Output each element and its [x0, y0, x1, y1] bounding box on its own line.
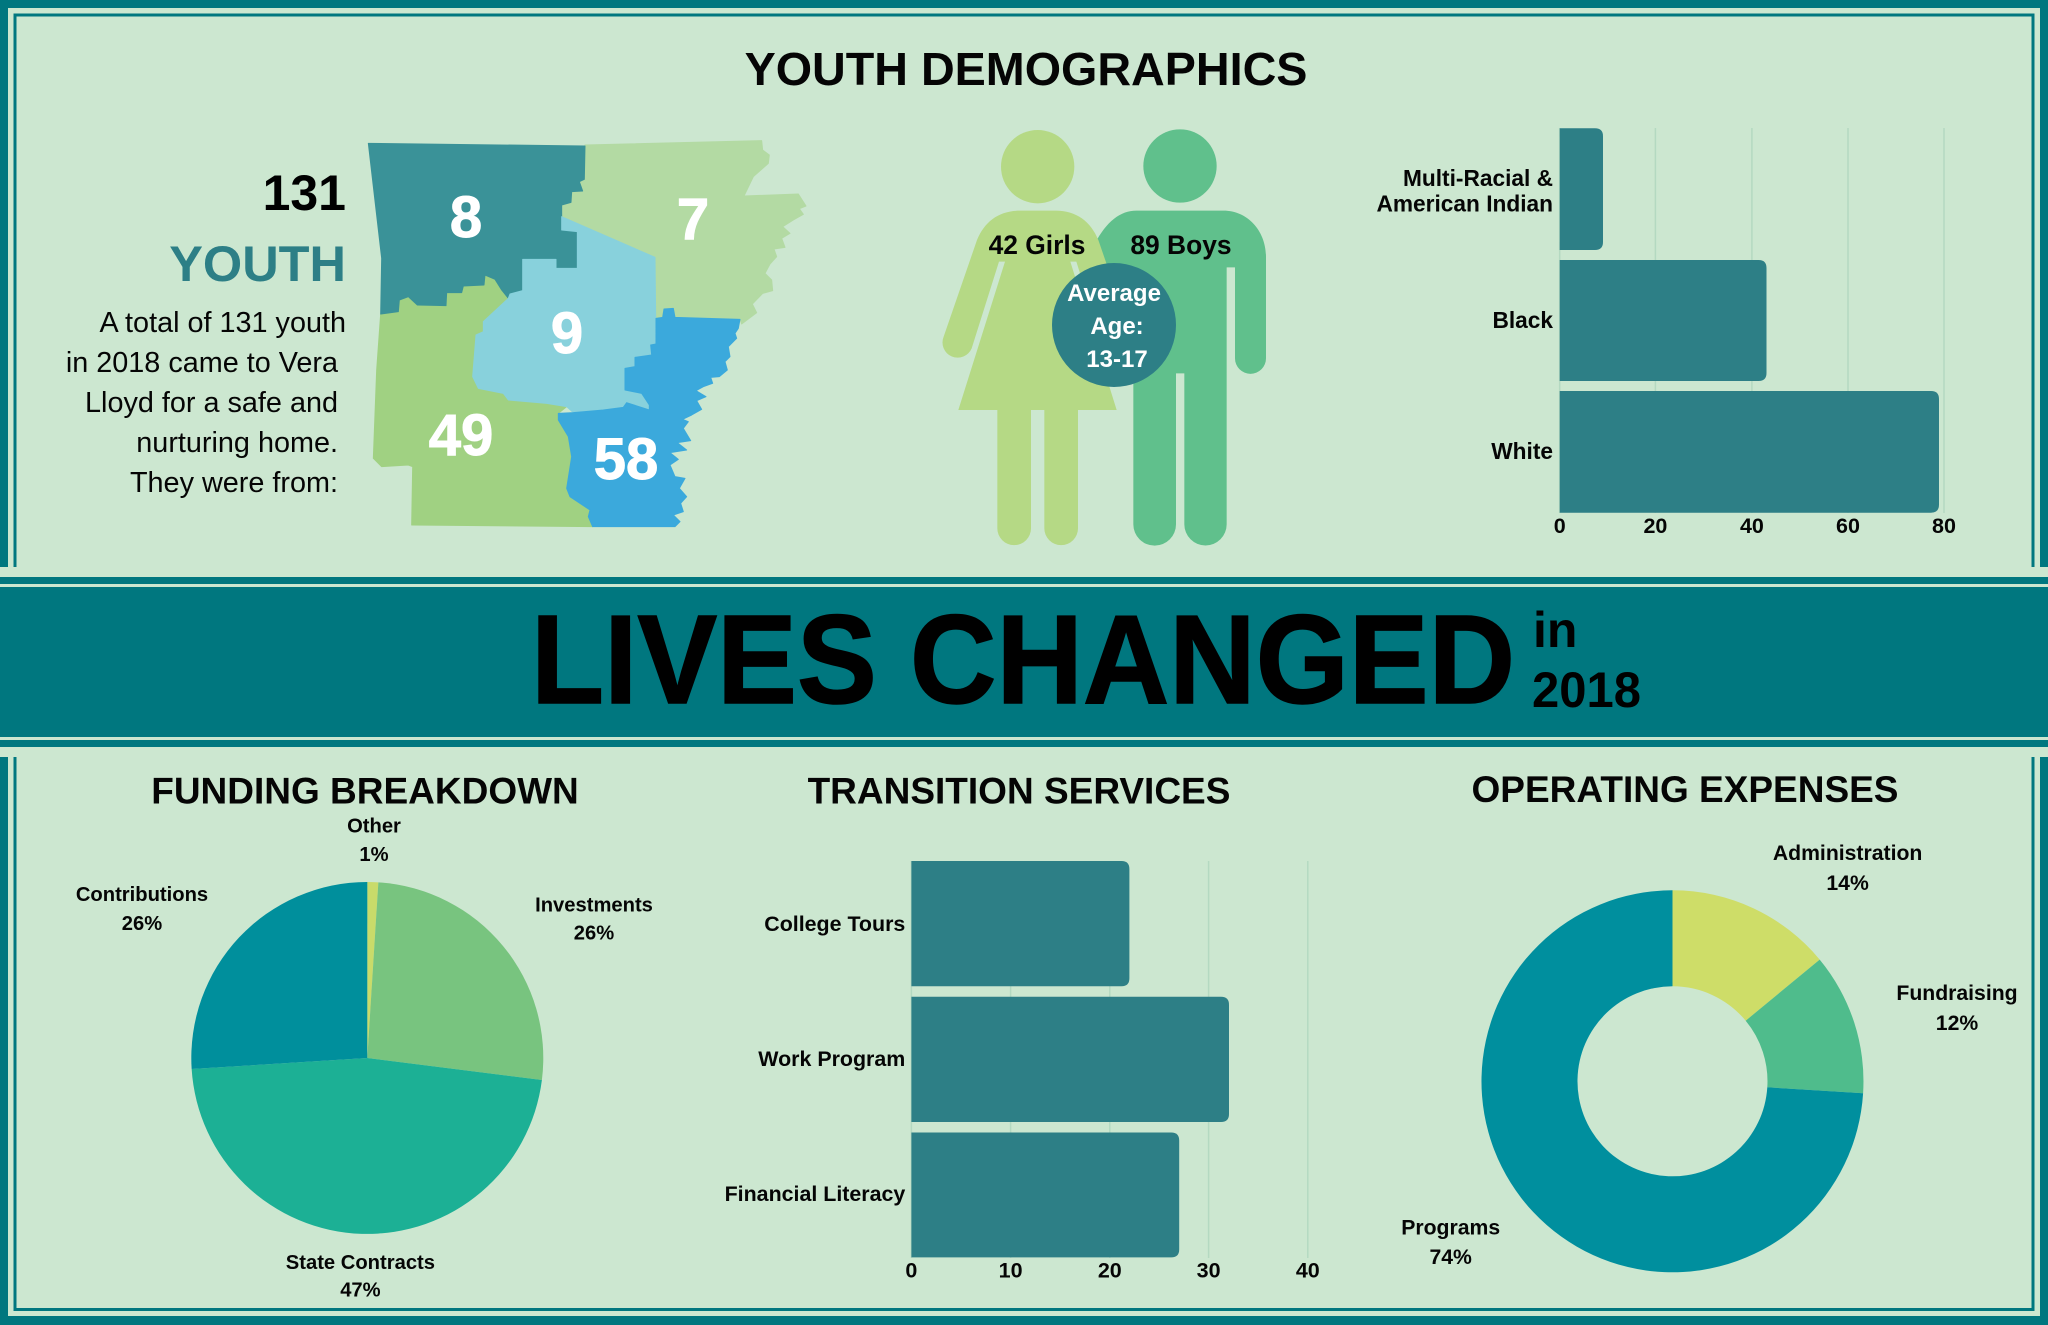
transition labels: Financial Literacy	[725, 1182, 905, 1206]
race axis: 0	[1554, 514, 1566, 538]
transition axis: 0	[905, 1259, 917, 1283]
transition axis	[905, 1259, 1320, 1283]
race axis: 40	[1740, 514, 1764, 538]
banner headline: LIVES CHANGED	[531, 588, 1515, 730]
label: contributions: Contributions	[76, 884, 208, 906]
text block: 131 youth	[66, 165, 346, 499]
map: youth by region	[368, 141, 806, 527]
bar chart: race	[1376, 128, 1956, 538]
map numbers: 7	[677, 187, 709, 252]
panel: funding breakdown	[76, 770, 653, 1302]
heading: operating expenses: OPERATING EXPENSES	[1472, 769, 1898, 810]
map numbers: 58	[594, 427, 658, 492]
badge: average age: Average	[1067, 280, 1161, 307]
label: other: Other	[347, 816, 401, 838]
text block: 131 youth: nurturing home.	[136, 427, 338, 459]
bar: work program	[911, 997, 1229, 1122]
label: contributions	[76, 884, 208, 935]
transition axis: 30	[1197, 1259, 1221, 1283]
text block: 131 youth: in 2018 came to Vera	[66, 347, 339, 379]
title: youth demographics: YOUTH DEMOGRAPHICS	[745, 43, 1307, 95]
heading: funding breakdown: FUNDING BREAKDOWN	[151, 770, 579, 812]
race labels	[1376, 165, 1553, 464]
bar: financial literacy	[911, 1132, 1179, 1257]
label: state contracts: State Contracts	[286, 1252, 435, 1274]
pie chart: funding	[191, 882, 543, 1234]
icon: boy	[1095, 129, 1266, 546]
text block: 131 youth: 131	[263, 165, 346, 221]
map numbers: 49	[429, 403, 493, 468]
banner year: in	[1533, 602, 1577, 658]
transition axis: 20	[1098, 1259, 1122, 1283]
race labels: Multi-Racial &	[1403, 165, 1553, 191]
text block: 131 youth: A total of 131 youth	[99, 307, 346, 339]
label: administration: 14%	[1826, 872, 1869, 895]
race axis	[1554, 514, 1956, 538]
label: other: 1%	[359, 844, 389, 866]
label: programs	[1401, 1217, 1500, 1269]
banner year: 2018	[1532, 662, 1641, 718]
label: investments: Investments	[535, 894, 653, 916]
bar: college tours	[911, 861, 1129, 986]
label: contributions: 26%	[122, 913, 162, 935]
figures: girls and boys	[942, 129, 1266, 546]
map numbers: 9	[551, 301, 583, 366]
panel: operating expenses	[1401, 769, 2018, 1272]
icon: girl	[942, 130, 1133, 545]
race labels: White	[1491, 438, 1553, 464]
text block: 131 youth: They were from:	[130, 467, 338, 499]
panel: transition services	[725, 770, 1320, 1283]
top frame	[0, 0, 2048, 567]
race axis: 60	[1836, 514, 1860, 538]
label: fundraising: 12%	[1936, 1012, 1978, 1035]
race axis: 20	[1643, 514, 1667, 538]
bar: black	[1560, 260, 1766, 381]
text block: 131 youth: Lloyd for a safe and	[85, 387, 338, 419]
map region: 8 youth	[368, 143, 585, 314]
bar: multi-racial	[1560, 128, 1603, 250]
race axis: 80	[1932, 514, 1956, 538]
label: other	[347, 816, 401, 866]
label: programs: Programs	[1401, 1217, 1500, 1240]
label: investments: 26%	[574, 923, 614, 945]
label: investments	[535, 894, 653, 945]
map region: 7 youth	[562, 141, 806, 324]
race labels: American Indian	[1376, 191, 1553, 217]
transition axis: 40	[1296, 1259, 1320, 1283]
label: state contracts	[286, 1252, 435, 1302]
text block: 131 youth: YOUTH	[169, 235, 346, 292]
label: programs: 74%	[1429, 1246, 1472, 1269]
donut chart: expenses	[1481, 890, 1863, 1272]
label: fundraising: Fundraising	[1896, 982, 2018, 1005]
label: administration: Administration	[1773, 842, 1922, 865]
banner year	[1532, 602, 1641, 718]
race labels: Black	[1492, 307, 1553, 333]
badge: average age	[1052, 263, 1176, 387]
banner: lives changed in 2018	[0, 577, 2048, 747]
badge: average age: Age:	[1090, 313, 1144, 340]
heading: transition services: TRANSITION SERVICES	[808, 770, 1230, 812]
label: state contracts: 47%	[340, 1280, 381, 1302]
girls count: 42 Girls	[989, 230, 1085, 260]
map region: 9 youth	[473, 217, 656, 413]
label: administration	[1773, 842, 1922, 895]
bottom frame	[0, 757, 2048, 1325]
map numbers: 8	[450, 185, 482, 250]
map region: 58 youth	[558, 308, 740, 527]
transition labels: College Tours	[764, 912, 905, 936]
map region: 49 youth	[373, 275, 593, 527]
label: fundraising	[1896, 982, 2018, 1035]
bar: white	[1560, 391, 1939, 513]
boys count: 89 Boys	[1130, 230, 1232, 260]
transition labels	[725, 912, 905, 1206]
transition labels: Work Program	[758, 1047, 905, 1071]
badge: average age: 13-17	[1086, 346, 1148, 373]
transition axis: 10	[999, 1259, 1023, 1283]
map numbers	[429, 185, 709, 492]
